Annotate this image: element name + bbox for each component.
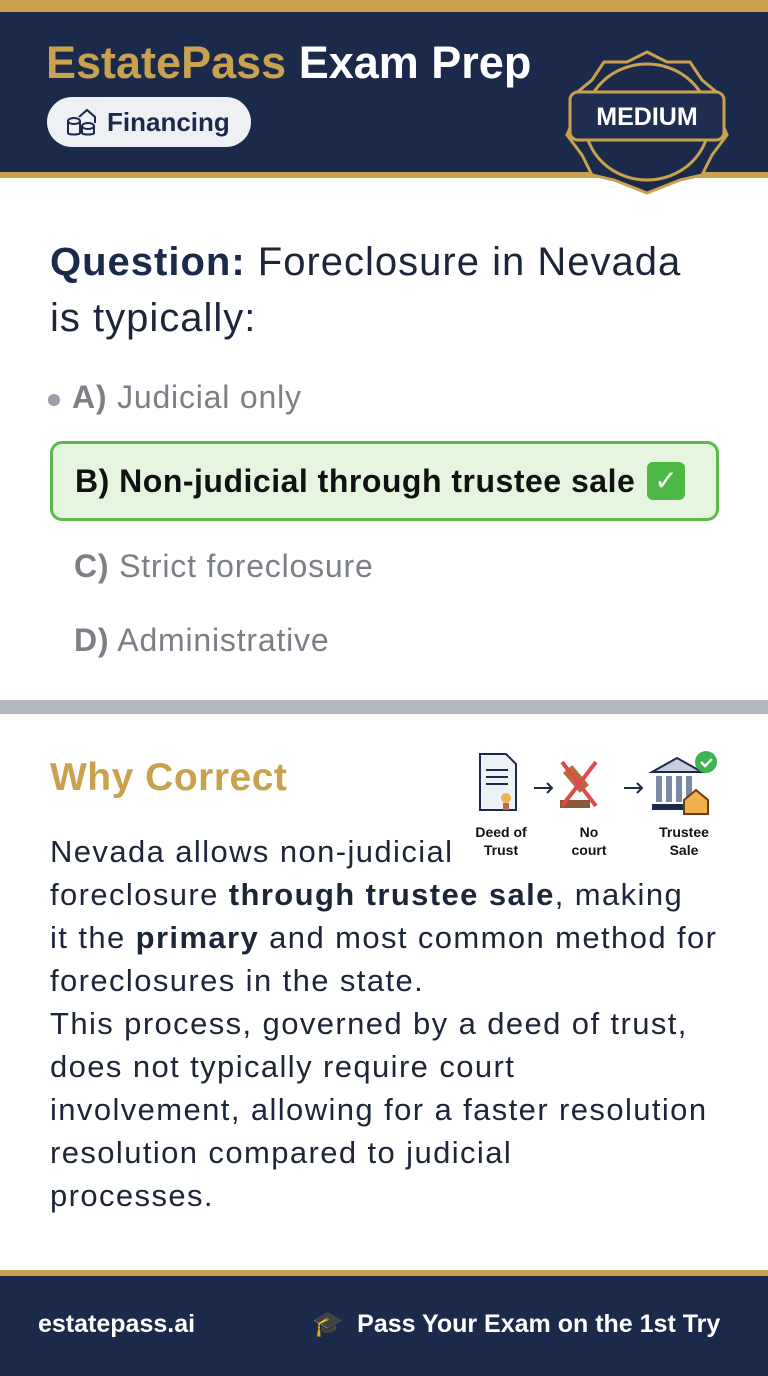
footer url: estatepass.ai [38,1310,195,1338]
category pill: Financing: Financing [107,106,230,136]
process diagram: Deed of [475,824,527,840]
header band [0,0,768,178]
explanation text: involvement, allowing for a faster resolution [50,1092,707,1127]
question: Question: Foreclosure in Nevada [50,240,681,284]
explanation text: it the primary and most common method for [50,920,717,955]
divider band [0,700,768,714]
category pill: Financing [47,97,251,147]
question [50,240,681,340]
title: EstatePass Exam Prep [46,37,531,88]
process diagram: court [572,842,607,858]
badge: MEDIUM [565,50,729,195]
explanation text: does not typically require court [50,1049,515,1084]
explanation text: This process, governed by a deed of trust, [50,1006,688,1041]
process diagram: No [580,824,598,840]
footer tagline: 🎓 Pass Your Exam on the 1st Try [312,1310,720,1338]
process diagram: Trust [484,842,518,858]
explanation text: Nevada allows non-judicial [50,834,453,869]
icon: coins and house [67,108,96,136]
option B correct: B) Non-judicial through trustee sale [75,462,635,498]
heading: Why Correct: Why Correct [50,756,287,799]
explanation text: foreclosure through trustee sale, making [50,877,683,912]
option C: C) Strict foreclosure [74,548,374,584]
explanation text: resolution compared to judicial [50,1135,512,1170]
badge: MEDIUM: MEDIUM [596,103,698,131]
option B correct [50,441,719,521]
footer [0,1270,768,1376]
explanation text: processes. [50,1178,214,1213]
process diagram [475,751,717,858]
process diagram: Trustee [659,824,709,840]
explanation text: foreclosures in the state. [50,963,424,998]
explanation text [50,834,717,1213]
option D: D) Administrative [74,622,329,658]
icon: check [647,462,685,500]
option A: A) Judicial only [72,379,302,415]
process diagram: Sale [670,842,699,858]
question: is typically: [50,296,256,340]
icon: check: ✓ [654,465,678,496]
